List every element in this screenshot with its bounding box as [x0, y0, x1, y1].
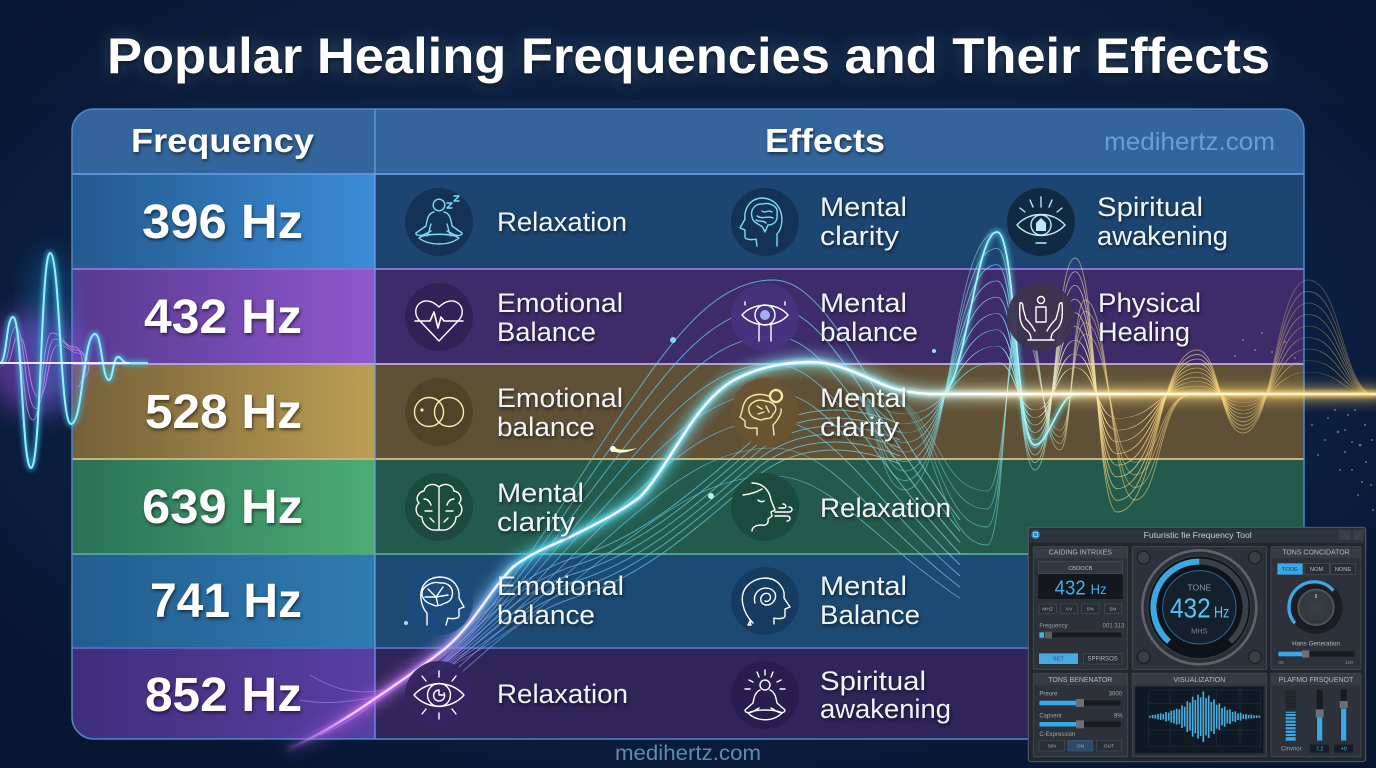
tool: central tone dial: TONE [1187, 583, 1212, 593]
frequency label: 432 Hz [144, 291, 302, 344]
tool: playing frequency meters: +0 [1341, 747, 1347, 753]
effect: Emotional Balance [497, 288, 623, 347]
wave: thin fan bundle [420, 280, 960, 680]
effect: Mental Balance: Balance [820, 600, 920, 630]
icon: meditating person with zzz [405, 188, 473, 256]
effect: Mental balance: Mental [820, 288, 907, 318]
wave: main glowing line [290, 362, 1376, 748]
tool: tone generator knob: NONE [1335, 567, 1351, 573]
effect: Mental clarity: clarity [820, 412, 900, 442]
tool: readout panel: SPFIRSOS [1088, 657, 1118, 663]
frequency label: 852 Hz [145, 669, 302, 722]
effect: Spiritual awakening: awakening [1097, 221, 1228, 251]
icon: brain in head [731, 188, 799, 256]
header: Frequency: Frequency [131, 122, 315, 159]
frequency label: 639 Hz [142, 481, 303, 534]
tool: sliders panel: Preore [1039, 692, 1058, 698]
row: 396 Hz [142, 188, 1228, 256]
frequency label: 741 Hz [150, 575, 302, 628]
tool: sliders panel: Capsent [1039, 713, 1062, 719]
tool: readout panel [1033, 547, 1128, 669]
tool: playing frequency meters [1271, 673, 1361, 757]
tool: readout panel: 001 313 [1103, 624, 1125, 630]
particles [404, 332, 1374, 625]
effect: Emotional balance: balance [497, 600, 595, 630]
tool: playing frequency meters: Cinvnor [1281, 747, 1302, 753]
tool: sliders panel: ON [1077, 743, 1084, 749]
tool: readout panel: SET [1053, 657, 1064, 663]
row: 852 Hz [145, 661, 951, 729]
icon: spiral in head [731, 567, 799, 635]
tool: sliders panel: SIN [1048, 743, 1056, 749]
effect: Emotional Balance: Emotional [497, 288, 623, 318]
tool: readout panel: VV [1066, 607, 1073, 613]
wave: bright cyan spike [940, 232, 1075, 445]
icon: overlapping circles [405, 378, 473, 446]
icon: brain top view [405, 473, 473, 541]
effect: Mental balance: balance [820, 317, 918, 347]
wave: purple tail [300, 675, 395, 735]
frequency column fills [72, 174, 375, 739]
effect: Mental clarity: Mental [497, 478, 584, 508]
icon: brain with gear [731, 378, 799, 446]
effect: Mental Balance [820, 571, 920, 630]
watermark: table header: medihertz.com [1104, 128, 1275, 156]
effect: Mental clarity: Mental [820, 383, 907, 413]
effect: Relaxation: Relaxation [497, 679, 628, 709]
tool: readout panel: 432 [1055, 577, 1086, 600]
tool: central tone dial: MHS [1191, 627, 1208, 636]
wave: left burst [0, 250, 148, 468]
tool: readout panel: MHZ [1042, 607, 1053, 613]
tool: tone generator knob: TONS CONCIDATOR [1282, 550, 1350, 557]
icon: eye on pillar [731, 283, 799, 351]
icon: healing hands [1007, 283, 1075, 351]
wave: lower fan bundle [420, 410, 900, 704]
tool: sliders panel: 3000 [1109, 692, 1123, 698]
tool: central tone dial: 432 [1170, 592, 1211, 623]
frequency label: 528 Hz [145, 386, 302, 439]
tool: sliders panel [1033, 673, 1128, 757]
effect: Relaxation: Relaxation [820, 493, 951, 523]
tool: sliders panel: 9% [1114, 713, 1123, 719]
icon: meditating figure with rays [731, 661, 799, 729]
tool: sliders panel: TONS BENENATOR [1048, 677, 1112, 684]
tool: central tone dial [1132, 547, 1267, 669]
tool: readout panel: Frequency [1039, 624, 1068, 630]
title: Popular Healing Frequencies and Their Effects [107, 28, 1270, 84]
effect: Emotional balance [497, 571, 624, 630]
panel: frequency tool UI [1028, 527, 1366, 762]
icon: face breathing out [731, 473, 799, 541]
tool title bar [1029, 528, 1365, 543]
tool: readout panel: CBDOCB [1068, 566, 1093, 572]
effect: Mental balance [820, 288, 918, 347]
tool: playing frequency meters: 7.2 [1316, 747, 1323, 753]
tool: central tone dial: Hz [1214, 604, 1229, 621]
tool: sliders panel: C-Expression [1039, 732, 1075, 738]
header: Effects: Effects [765, 122, 885, 159]
row: 432 Hz [144, 283, 1201, 351]
tool: playing frequency meters: PLAFMO FRSQUENOT [1279, 677, 1354, 684]
tool: tone generator knob: Hans Generation [1292, 641, 1340, 648]
row: 528 Hz [145, 378, 907, 446]
effect: Physical Healing: Healing [1098, 317, 1190, 347]
frequency label: 396 Hz [142, 196, 303, 249]
tool: tone generator knob: 00 [1278, 660, 1284, 666]
row: 741 Hz [150, 567, 920, 635]
effect: Emotional balance: Emotional [497, 571, 624, 601]
effect: Mental clarity [497, 478, 584, 537]
effects column fills [375, 174, 1304, 739]
tool: tone generator knob: TOOE [1282, 567, 1298, 573]
effect: Physical Healing: Physical [1098, 288, 1201, 318]
effect: Mental clarity [820, 383, 907, 442]
effect: Physical Healing [1098, 288, 1201, 347]
table header row [72, 109, 1304, 174]
tool: readout panel: CAIDING INTRIXES [1049, 550, 1112, 557]
effect: Mental clarity: clarity [820, 221, 900, 251]
tool: sliders panel: OUT [1104, 743, 1114, 749]
effect: Spiritual awakening [1097, 192, 1228, 251]
tool: visualization waveform [1132, 673, 1267, 757]
tool title bar: Futuristic fie Frequency Tool [1144, 530, 1252, 540]
effect: Mental Balance: Mental [820, 571, 907, 601]
tool: tone generator knob [1271, 547, 1361, 669]
effect: Spiritual awakening: awakening [820, 694, 951, 724]
effect: Spiritual awakening [820, 666, 951, 724]
tool: readout panel: Hz [1091, 581, 1107, 597]
icon: heart with pulse [405, 283, 473, 351]
effect: Relaxation: Relaxation [497, 207, 627, 237]
row: 639 Hz [142, 473, 951, 541]
icon: awakening eye [1007, 188, 1075, 256]
effect: Emotional Balance: Balance [497, 317, 596, 347]
icon: brain in head profile [405, 567, 473, 635]
panel: frequency table [72, 109, 1304, 739]
wave: right spike bundles [850, 232, 1376, 545]
icon: radiant eye [405, 661, 473, 729]
effect: Mental clarity: Mental [820, 192, 907, 222]
tool: tone generator knob: NOM [1310, 567, 1324, 573]
tool: readout panel: 5% [1087, 607, 1094, 613]
glowing sound waves [0, 232, 1376, 748]
effect: Emotional balance [497, 383, 623, 442]
effect: Mental clarity [820, 192, 907, 251]
effect: Spiritual awakening: Spiritual [820, 666, 926, 696]
tool: readout panel: 5M [1110, 607, 1116, 613]
effect: Spiritual awakening: Spiritual [1097, 192, 1203, 222]
effect: Emotional balance: Emotional [497, 383, 623, 413]
effect: Mental clarity: clarity [497, 507, 576, 537]
effect: Emotional balance: balance [497, 412, 595, 442]
tool: visualization waveform: VISUALIZATION [1173, 677, 1225, 684]
watermark: footer: medihertz.com [615, 742, 761, 765]
tool: tone generator knob: 100 [1345, 660, 1354, 666]
